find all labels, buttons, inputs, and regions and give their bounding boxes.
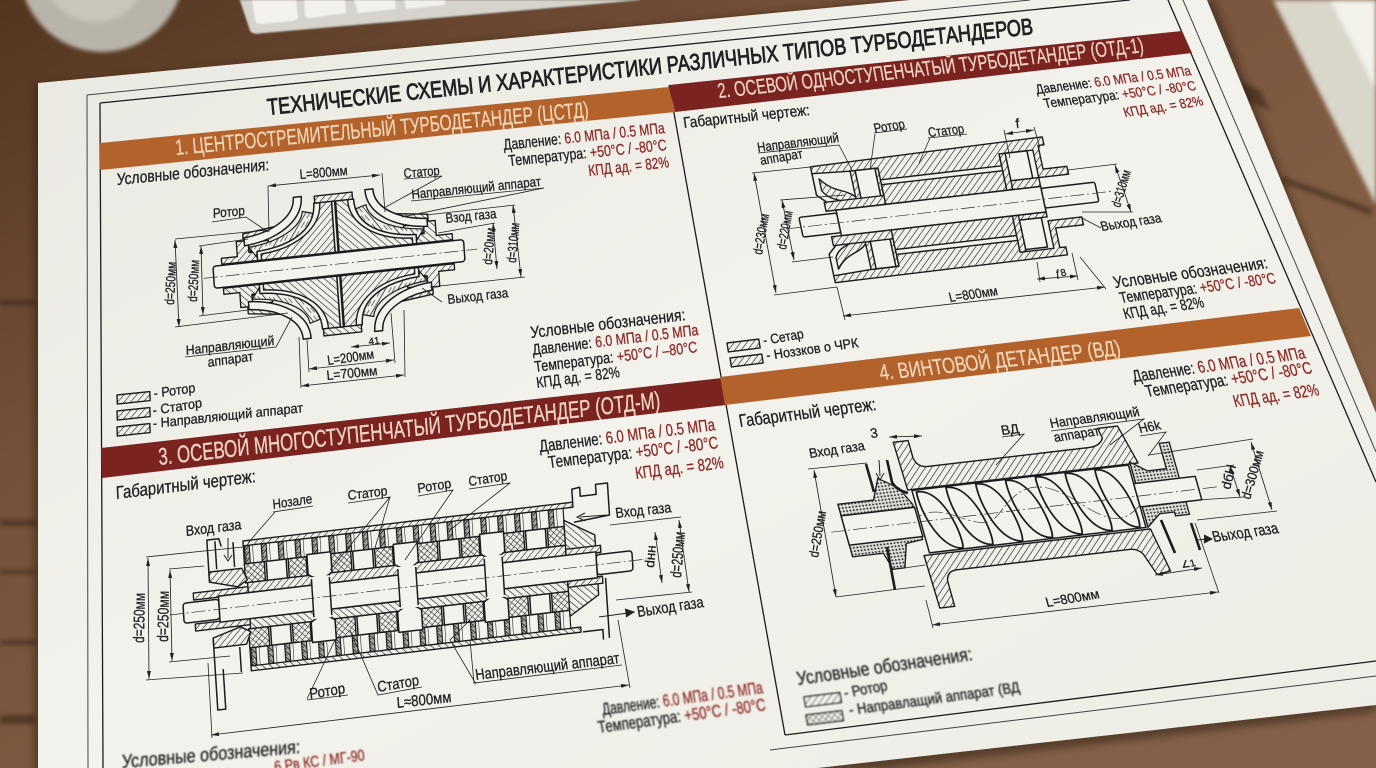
drawing labels 1: L=800мм — [299, 163, 348, 182]
drawing labels 1: Статор — [403, 163, 440, 181]
drawing labels 3: d=250мм — [668, 531, 689, 578]
legend 4: - Ротор — [842, 677, 889, 702]
banner 1 — [100, 87, 675, 170]
banner 4: 4. ВИНТОВОЙ ДЕТАНДЕР (ВД) — [877, 335, 1123, 385]
object: white mug — [20, 0, 184, 52]
drawing labels 2: d=230мм — [750, 213, 772, 256]
specs 1 bottom: Давление: 6.0 МПа / 0.5 МПа — [531, 322, 700, 359]
specs 1 bottom: КПД ад. = 82% — [535, 364, 621, 392]
legend 4: Условные обозначения: — [795, 644, 974, 690]
specs 2 bottom — [1111, 254, 1278, 323]
specs 3 bottom: Давление: 6.0 МПа / 0.5 МПа — [600, 678, 765, 719]
drawing labels 1: L=700мм — [326, 363, 378, 383]
specs 2 top: Температура: +50°C / -80°C — [1042, 78, 1198, 111]
object: paper roll at the top right — [1273, 0, 1376, 205]
banner 2 — [669, 31, 1192, 112]
specs 1 top — [502, 120, 670, 180]
drawing labels 3: Направляющий аппарат — [474, 650, 621, 684]
drawing labels 1: Взод газа — [445, 206, 497, 226]
specs 4: Давление: 6.0 МПа / 0.5 МПа — [1130, 344, 1308, 386]
drawing labels 1: L=200мм — [326, 347, 375, 368]
specs 1 top: КПД ад. = 82% — [587, 154, 670, 180]
specs 1 bottom: Условные обозначения: — [529, 306, 686, 342]
drawing labels 2: аппарат — [759, 146, 804, 168]
specs 4: Температура: +50°C / -80°C — [1143, 359, 1314, 401]
drawing labels 4: d=300мм — [1238, 449, 1267, 501]
banner 4 — [720, 308, 1311, 405]
specs 2 top — [1034, 63, 1205, 120]
drawing labels 4 — [806, 404, 1281, 610]
drawing labels 4: d=250мм — [806, 510, 829, 559]
legend 1: - Направляющий аппарат — [153, 400, 303, 431]
specs 3 bottom: Температура: +50°C / -80°C — [596, 695, 767, 737]
drawing labels 2: d=310мм — [1109, 168, 1134, 209]
drawing labels 2: Ротор — [872, 116, 906, 136]
dimensions 4 — [808, 419, 1277, 628]
drawing labels 1: d=250мм — [162, 261, 179, 305]
drawing labels 4: ВД — [999, 421, 1021, 438]
legend 2 — [727, 326, 860, 367]
specs 4: КПД ад. = 82% — [1231, 381, 1321, 411]
drawing labels 1: Ротор — [213, 203, 245, 221]
dimensions 2 — [752, 127, 1133, 320]
legend 1: - Статор — [152, 395, 203, 418]
dimensions 1 — [175, 173, 544, 388]
drawing labels 4: аппарат — [1052, 423, 1101, 445]
drawing labels 3: Нозале — [272, 491, 313, 512]
specs 3 top: КПД ад. = 82% — [634, 453, 725, 483]
banner 2: 2. ОСЕВОЙ ОДНОСТУПЕНЧАТЫЙ ТУРБОДЕТАНДЕР (ОТД-1) — [716, 33, 1145, 103]
specs 3 top: Температура: +50°C / -80°C — [547, 433, 719, 472]
legend heading 1: Условные обозначения: — [117, 155, 269, 189]
drawing: screw expander section — [809, 407, 1243, 618]
drawing labels 2: Направляющий — [756, 130, 840, 155]
drawing: axial multi-stage section — [164, 479, 653, 715]
specs 1 top: Температура: +50°C / -80°C — [507, 137, 668, 170]
drawing labels 3: d=250мм — [155, 591, 173, 642]
drawing labels 3: d=250мм — [131, 593, 149, 643]
drawing labels 1: d=250мм — [185, 259, 202, 302]
drawing labels 3: Вход газа — [615, 500, 673, 522]
heading 4: Габаритный чертеж: — [737, 394, 878, 431]
legend 2: - Ноззков о ЧРК — [765, 335, 860, 363]
drawing labels 3: Статор — [468, 468, 508, 489]
panel: 3. axial multi-stage turbo-expander — [101, 378, 767, 768]
drawing labels 2 — [750, 116, 1164, 305]
dimensions 3 — [146, 483, 692, 738]
drawing labels 3: Статор — [347, 483, 388, 503]
drawing labels 1: Направляющий аппарат — [411, 174, 542, 202]
heading 3: Габаритный чертеж: — [115, 466, 256, 503]
drawing labels 1: d=20мм — [480, 227, 498, 265]
legend 4 — [795, 644, 1021, 725]
specs 1 top: Давление: 6.0 МПа / 0.5 МПа — [502, 120, 666, 154]
specs 2 top: Давление: 6.0 МПа / 0.5 МПа — [1034, 63, 1193, 97]
specs 1 bottom — [529, 306, 700, 392]
drawing labels 1: 41 — [368, 335, 381, 348]
object: keyboard — [240, 0, 640, 34]
panel: 2. axial single-stage turbo-expander — [669, 31, 1278, 367]
specs 3 top — [538, 415, 725, 483]
specs 2 bottom: Условные обозначения: — [1111, 254, 1270, 292]
drawing labels 4: H6k — [1136, 418, 1163, 436]
legend 1 — [117, 380, 303, 436]
drawing labels 3: Ротор — [309, 680, 346, 703]
drawing labels 2: f — [1015, 116, 1020, 131]
drawing labels 3: dнн — [642, 545, 659, 568]
legend 1: - Ротор — [153, 380, 196, 401]
drawing labels 2: Статор — [927, 121, 965, 140]
specs 2 top: КПД ад. = 82% — [1121, 94, 1205, 120]
drawing labels 2: L=800мм — [947, 283, 999, 305]
drawing labels 2: ƒ8 — [1054, 268, 1068, 280]
heading 2: Габаритный чертеж: — [682, 102, 811, 132]
drawing labels 1 — [162, 163, 542, 383]
drawing labels 3 — [131, 468, 705, 712]
drawing labels 3: Выход газа — [636, 594, 705, 621]
panel: 1. radial turbo-expander — [100, 87, 700, 436]
specs 3 bottom — [596, 678, 767, 737]
legend 2: - Сетар — [762, 326, 805, 348]
panel: 4. screw expander — [720, 308, 1321, 725]
drawing labels 2: Выход газа — [1099, 210, 1164, 234]
drawing: radial turbine section — [199, 178, 482, 349]
banner 3: 3. ОСЕВОЙ МНОГОСТУПЕНЧАТЫЙ ТУРБОДЕТАНДЕР (ОТД-М) — [157, 386, 661, 471]
drawing labels 3: Ротор — [417, 476, 452, 496]
drawing labels 3: Статор — [376, 672, 420, 696]
drawing labels 1: Выход газа — [447, 285, 509, 307]
legend 4: - Направлащий аппарат (ВД — [848, 679, 1021, 719]
drawing labels 1: Направляющий — [185, 333, 275, 358]
drawing labels 4: L=800мм — [1044, 586, 1101, 610]
banner 3 — [101, 378, 726, 478]
specs 4 — [1130, 344, 1321, 411]
drawing labels 2: d=220мм — [774, 210, 796, 251]
drawing labels 4: Направляющий — [1048, 404, 1141, 431]
specs 3 top: Давление: 6.0 МПа / 0.5 МПа — [538, 415, 717, 456]
drawing labels 1: d=310мм — [504, 222, 522, 263]
drawing: axial single-stage section — [773, 130, 1126, 287]
drawing labels 3: Вход газа — [185, 517, 243, 540]
drawing labels 4: Вход газа — [808, 438, 866, 461]
drawing labels 4: dбН — [1218, 463, 1239, 491]
banner 1: 1. ЦЕНТРОСТРЕМИТЕЛЬНЫЙ ТУРБОДЕТАНДЕР (ЦСТД) — [174, 97, 590, 160]
drawing labels 4: ∠1 — [1180, 558, 1198, 571]
drawing labels 4: 3 — [869, 425, 879, 441]
specs 1 bottom: Температура: +50°C / –80°C — [533, 339, 698, 376]
specs 2 bottom: КПД ад. = 82% — [1121, 294, 1206, 323]
drawing labels 4: Выход газа — [1210, 520, 1281, 546]
specs 2 bottom: Температура: +50°C / -80°C — [1118, 270, 1278, 307]
drawing labels 1: аппарат — [207, 349, 254, 370]
drawing labels 3: L≈800мм — [396, 689, 452, 712]
